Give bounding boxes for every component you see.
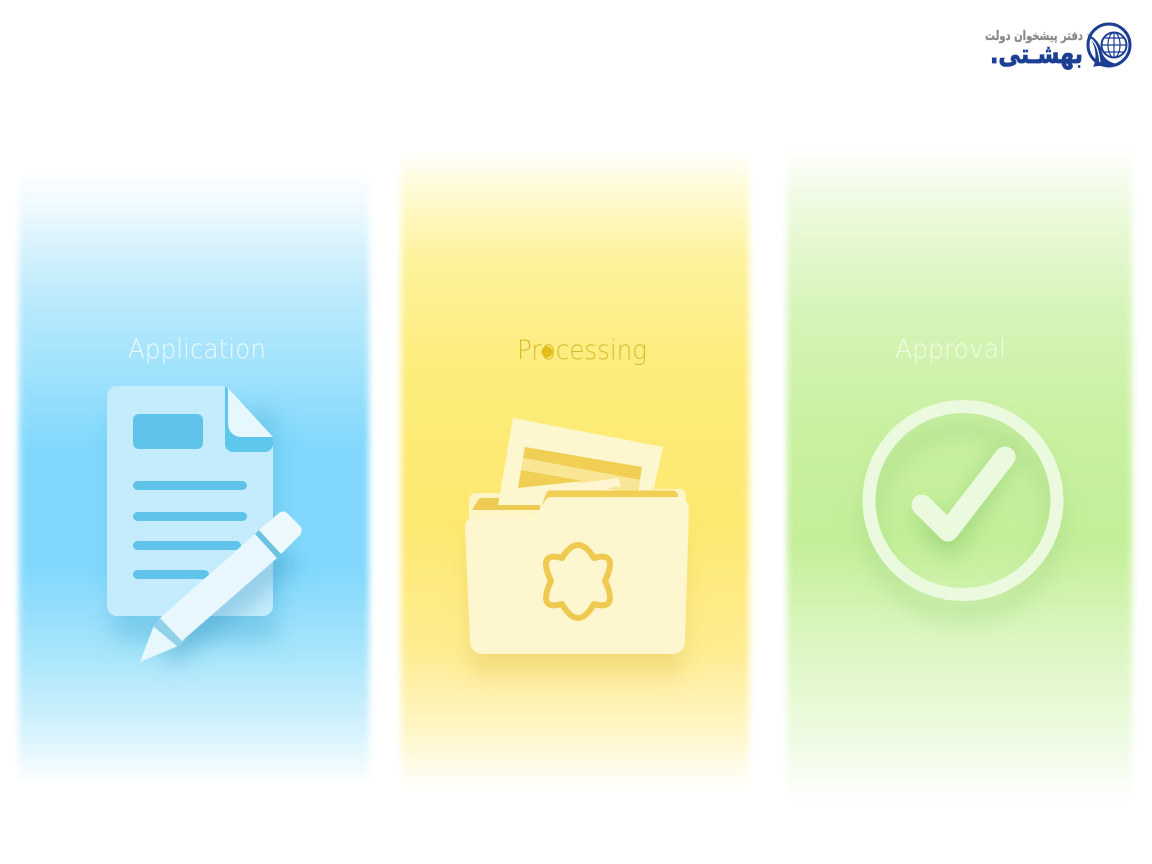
logo text: office name: دفتر پیشخوان دولت: [985, 29, 1083, 44]
logo emblem: globe: [1087, 24, 1130, 67]
icon: check mark in circle: [869, 406, 1057, 612]
panel: application: [19, 170, 369, 785]
icon: processing dot on heading: [542, 346, 552, 358]
panel: processing: [401, 150, 749, 790]
logo text: brand name: بهشـتی.: [990, 39, 1083, 70]
heading: Application: Application: [128, 334, 266, 365]
logo: [985, 24, 1130, 70]
icon: pencil: [140, 511, 302, 662]
icon: folder with papers: [465, 418, 689, 675]
icon: star badge: [546, 545, 610, 618]
panel: approval: [787, 145, 1132, 805]
heading: Approval: Approval: [895, 334, 1006, 365]
heading: Processing: Processing: [517, 335, 647, 366]
icon: document with pencil: [107, 386, 302, 662]
